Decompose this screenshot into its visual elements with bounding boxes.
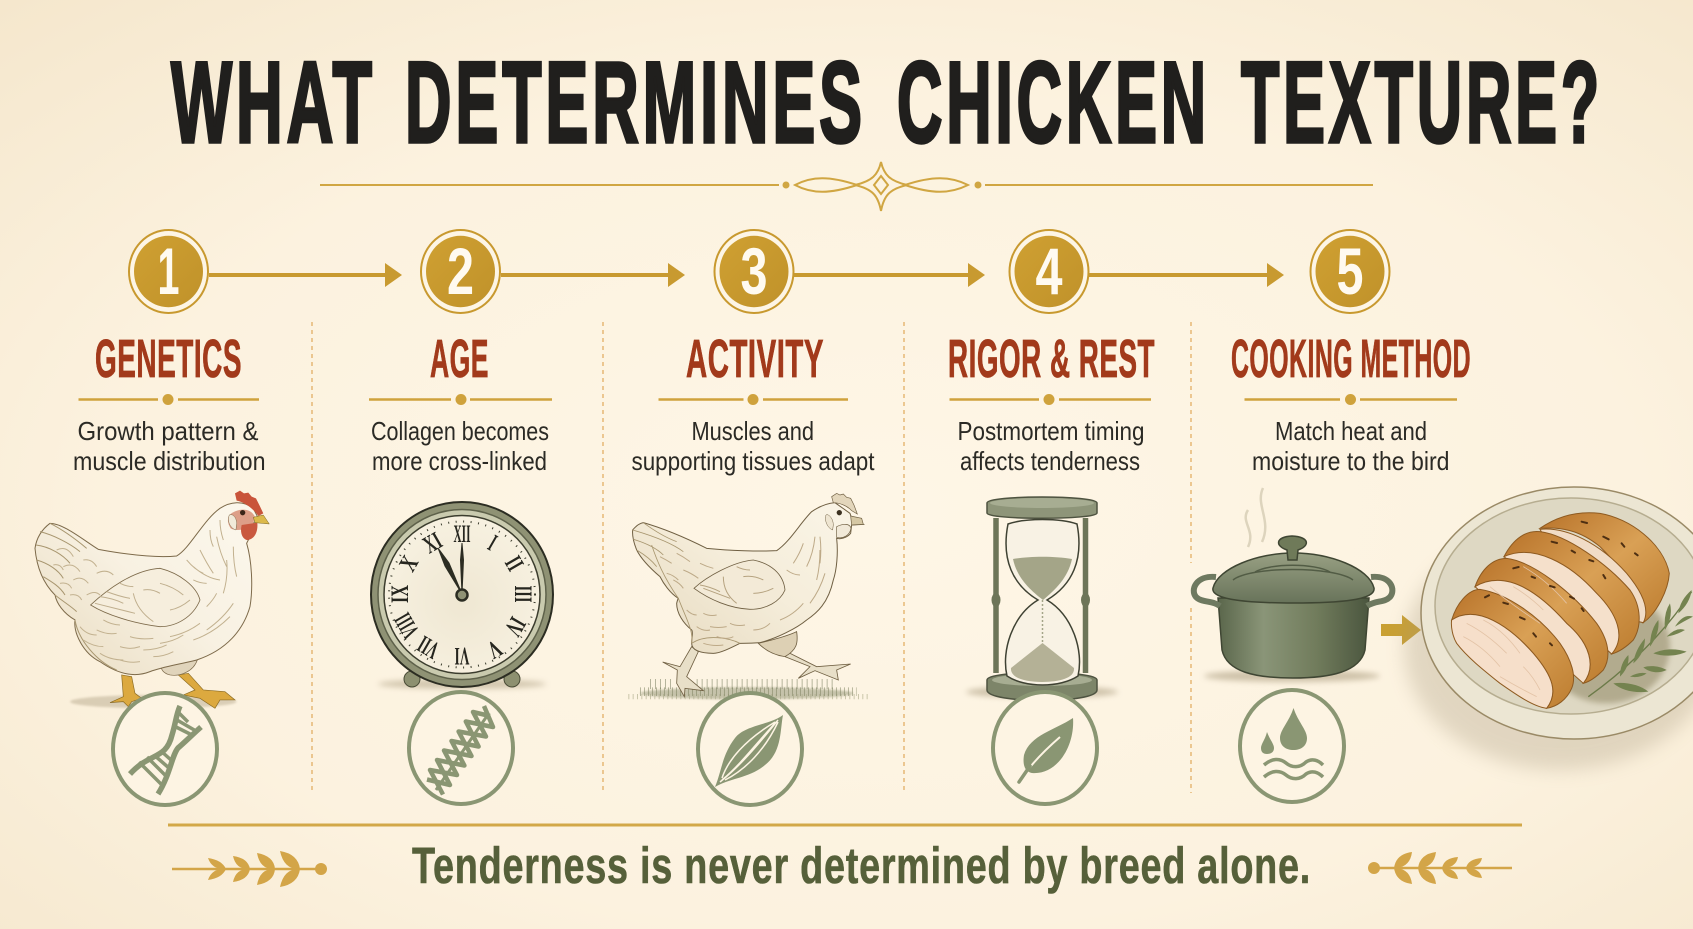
badge 1 <box>129 230 208 313</box>
panel: step 2 age <box>369 230 553 804</box>
description activity: Muscles and <box>692 416 814 446</box>
dot <box>1345 394 1356 405</box>
illustration: clock: VII <box>413 630 444 663</box>
badge 3 <box>714 230 794 313</box>
divider <box>1244 398 1457 401</box>
right sprig ornament <box>1368 852 1512 884</box>
description rigor and rest: Postmortem timing <box>958 416 1144 446</box>
description rigor and rest <box>958 416 1144 476</box>
description activity: supporting tissues adapt <box>632 446 875 476</box>
arrow: pot to plate <box>1381 615 1421 645</box>
illustration: clock: IX <box>387 585 414 603</box>
description cooking method: Match heat and <box>1275 416 1427 446</box>
illustration: clock: V <box>482 634 506 663</box>
badge 4: 4 <box>1036 234 1063 308</box>
description genetics: Growth pattern & <box>78 416 258 446</box>
divider <box>950 398 1151 401</box>
title <box>171 39 1603 167</box>
arrow: step 4 to 5 <box>1089 263 1284 287</box>
icon: leaf <box>993 692 1097 804</box>
badge 2: 2 <box>447 234 474 308</box>
divider <box>369 398 552 401</box>
badge 1: 1 <box>158 234 180 308</box>
panel: step 5 cooking method <box>1194 230 1693 802</box>
dot <box>162 394 174 405</box>
badge 4 <box>1010 230 1088 313</box>
heading genetics: GENETICS <box>95 329 242 389</box>
description age: Collagen becomes <box>371 416 549 446</box>
panel: step 3 activity <box>628 230 875 805</box>
illustration: hourglass <box>966 497 1118 700</box>
illustration: standing hen <box>35 491 269 708</box>
badge 5 <box>1310 230 1390 313</box>
badge 3: 3 <box>740 234 768 308</box>
title: DETERMINES <box>405 39 866 167</box>
arrow: step 2 to 3 <box>501 263 685 287</box>
description genetics <box>73 416 266 476</box>
illustration: clock: I <box>483 530 501 556</box>
description age: more cross-linked <box>372 446 547 476</box>
left sprig ornament <box>172 851 327 887</box>
dot <box>748 394 758 405</box>
heading rigor and rest: RIGOR & REST <box>948 329 1155 389</box>
bottom rule <box>168 824 1522 826</box>
icon: dna <box>113 693 217 805</box>
illustration: clock: X <box>394 551 424 576</box>
description rigor and rest: affects tenderness <box>960 446 1140 476</box>
badge 2 <box>421 230 500 313</box>
icon: muscle <box>698 693 802 805</box>
badge 5: 5 <box>1336 234 1364 308</box>
panel: step 4 rigor and rest <box>948 230 1155 804</box>
title ornament divider <box>320 162 1373 211</box>
arrow: step 1 to 2 <box>209 263 402 287</box>
title: CHICKEN <box>897 39 1210 167</box>
heading activity: ACTIVITY <box>686 329 824 389</box>
illustration: clock: III <box>509 586 536 602</box>
illustration: clock <box>371 502 553 689</box>
illustration: clock: VIII <box>390 608 425 642</box>
divider <box>658 398 848 401</box>
illustration: clock: II <box>499 552 528 576</box>
title: WHAT <box>171 39 376 167</box>
illustration: walking hen <box>628 493 868 699</box>
panel: step 1 genetics <box>35 230 269 805</box>
chicken slices <box>1451 513 1669 708</box>
illustration: clock: XII <box>454 521 470 548</box>
arrow: step 3 to 4 <box>794 263 985 287</box>
illustration: clock: IV <box>499 612 531 640</box>
dot <box>456 394 466 405</box>
illustration: pot with steam <box>1194 488 1392 682</box>
description activity <box>632 416 875 476</box>
rosemary sprig <box>1588 590 1693 697</box>
divider <box>78 398 259 401</box>
illustration: clock: XI <box>419 527 447 559</box>
description cooking method: moisture to the bird <box>1252 446 1450 476</box>
description genetics: muscle distribution <box>73 446 266 476</box>
icon: collagen braid <box>409 692 513 804</box>
description cooking method <box>1252 416 1450 476</box>
dot <box>1044 394 1054 405</box>
illustration: clock: VI <box>454 642 470 669</box>
description age <box>371 416 549 476</box>
icon: water drops <box>1240 690 1344 802</box>
panel: step 2 age: AGE <box>430 329 489 389</box>
illustration: plate of sliced chicken <box>1404 487 1693 770</box>
closing statement: Tenderness is never determined by breed alone. <box>412 837 1311 894</box>
